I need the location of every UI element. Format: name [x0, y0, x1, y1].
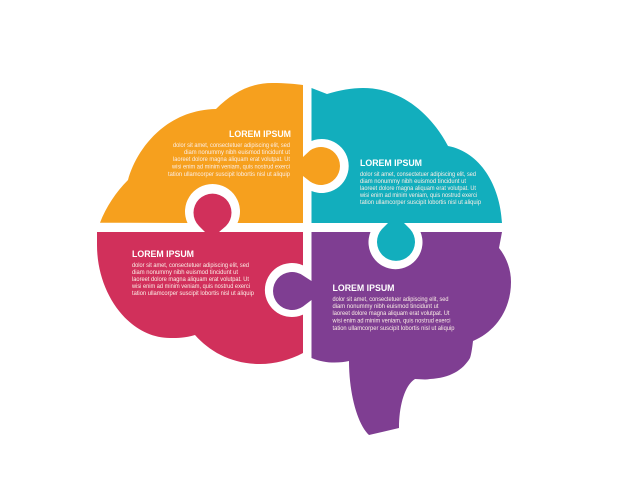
purple body text: tation ullamcorper suscipit lobortis nisl ut aliquip	[332, 325, 455, 332]
teal body text: wisi enim ad minim veniam, quis nostrud exerci	[359, 192, 477, 199]
orange body text: tation ullamcorper suscipit lobortis nisl ut aliquip	[168, 171, 291, 178]
orange body text: laoreet dolore magna aliquam erat volutpat. Ut	[173, 156, 290, 163]
purple body text: wisi enim ad minim veniam, quis nostrud exerci	[332, 318, 450, 324]
purple body text: diam nonummy nibh euismod tincidunt ut	[332, 303, 439, 310]
teal body text: diam nonummy nibh euismod tincidunt ut	[360, 178, 466, 185]
pink body text: dolor sit amet, consectetuer adipiscing elit, sed	[132, 262, 249, 269]
orange body text: dolor sit amet, consectetuer adipiscing elit, sed	[173, 142, 290, 149]
pink body text: laoreet dolore magna aliquam erat volutpat. Ut	[132, 276, 249, 283]
purple heading: LOREM IPSUM	[332, 283, 394, 293]
teal body text: tation ullamcorper suscipit lobortis nisl ut aliquip	[360, 199, 482, 206]
teal piece shape	[312, 88, 502, 261]
pink body text: tation ullamcorper suscipit lobortis nisl ut aliquip	[132, 290, 255, 297]
orange body text: diam nonummy nibh euismod tincidunt ut	[184, 149, 290, 156]
orange piece shape	[100, 83, 340, 223]
teal heading: LOREM IPSUM	[360, 158, 422, 168]
purple body text	[332, 296, 455, 332]
orange body text: wisi enim ad minim veniam, quis nostrud exerci	[171, 164, 290, 170]
orange body text	[168, 142, 291, 178]
pink heading: LOREM IPSUM	[132, 249, 194, 259]
teal body text: dolor sit amet, consectetuer adipiscing elit, sed	[360, 171, 476, 178]
orange heading: LOREM IPSUM	[229, 129, 291, 139]
pink body text: wisi enim ad minim veniam, quis nostrud exerci	[131, 283, 250, 290]
purple body text: dolor sit amet, consectetuer adipiscing elit, sed	[332, 296, 449, 303]
purple body text: laoreet dolore magna aliquam erat volutpat. Ut	[332, 310, 450, 317]
panel: pink bottom-left puzzle piece	[97, 194, 303, 364]
teal body text	[359, 171, 482, 206]
teal body text: laoreet dolore magna aliquam erat volutpat. Ut	[360, 185, 476, 192]
pink piece shape	[97, 194, 303, 364]
panel: teal top-right puzzle piece	[312, 88, 502, 261]
purple piece shape	[273, 232, 511, 435]
panel: orange top-left puzzle piece	[100, 83, 340, 223]
pink body text	[131, 262, 255, 297]
pink body text: diam nonummy nibh euismod tincidunt ut	[132, 269, 238, 276]
panel: purple bottom-right puzzle piece with brain stem	[273, 232, 511, 435]
